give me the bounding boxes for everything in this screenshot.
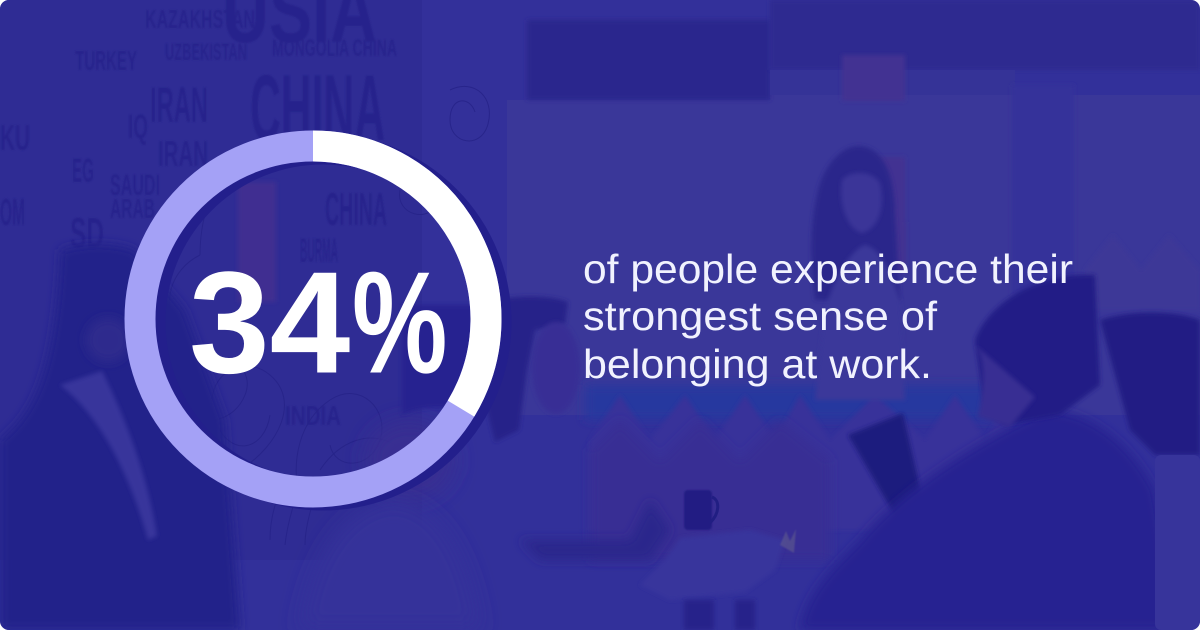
blue strip behind chevrons — [585, 385, 1025, 420]
mural lettering — [0, 0, 397, 431]
dark shadow ring — [150, 149, 496, 495]
mural lettering: INDIA — [285, 400, 341, 431]
percentage value — [192, 271, 445, 374]
mural lettering: KAZAKHSTAN — [145, 4, 255, 34]
mural lettering: EG — [72, 152, 94, 190]
back wall — [507, 95, 1200, 415]
ceiling band — [507, 0, 770, 100]
mural lettering: MONGOLIA CHINA — [272, 35, 397, 62]
dark tablet — [847, 412, 920, 508]
mural lettering: IRAN — [158, 133, 208, 174]
seated people centre — [365, 296, 578, 492]
left mural wall — [0, 0, 397, 426]
mural lettering: IRAN — [150, 77, 208, 133]
inner disc darkening — [404, 305, 470, 412]
mural lettering: KU — [0, 117, 30, 158]
reddish pillar detail — [238, 182, 276, 302]
mural lettering: SD — [70, 209, 104, 258]
ring track — [140, 146, 486, 492]
donut chart: 34% — [140, 146, 486, 492]
statement text: belonging at work. — [583, 341, 932, 387]
mural lettering: OM — [0, 192, 25, 234]
statement text: of people experience their — [583, 246, 1073, 292]
percentage value: 34 — [189, 242, 350, 404]
mural lettering: SAUDI — [110, 169, 160, 202]
statement text — [583, 246, 1073, 387]
mural lettering: TURKEY — [75, 45, 137, 76]
chevron wall lower — [600, 397, 1000, 429]
left mural wall: CHINA — [250, 55, 385, 160]
chevron wall upper — [1085, 235, 1200, 310]
seated man left in dark suit — [0, 244, 240, 630]
seated man right — [800, 275, 1200, 630]
ring value arc — [313, 146, 486, 409]
pillar — [1012, 85, 1074, 295]
table with mug and cups — [520, 490, 796, 630]
mural lettering: BURMA — [300, 232, 338, 270]
mural lettering: IQ — [128, 108, 148, 146]
standing presenter — [811, 146, 905, 400]
red sign letters — [842, 55, 906, 272]
percentage value: % — [352, 243, 447, 404]
mural swirl lines — [170, 86, 489, 545]
left mural wall: CHINA — [325, 183, 387, 235]
mural lettering: UZBEKISTAN — [165, 39, 247, 66]
statement text: strongest sense of — [583, 293, 938, 339]
mural lettering: ARAB — [110, 193, 155, 224]
